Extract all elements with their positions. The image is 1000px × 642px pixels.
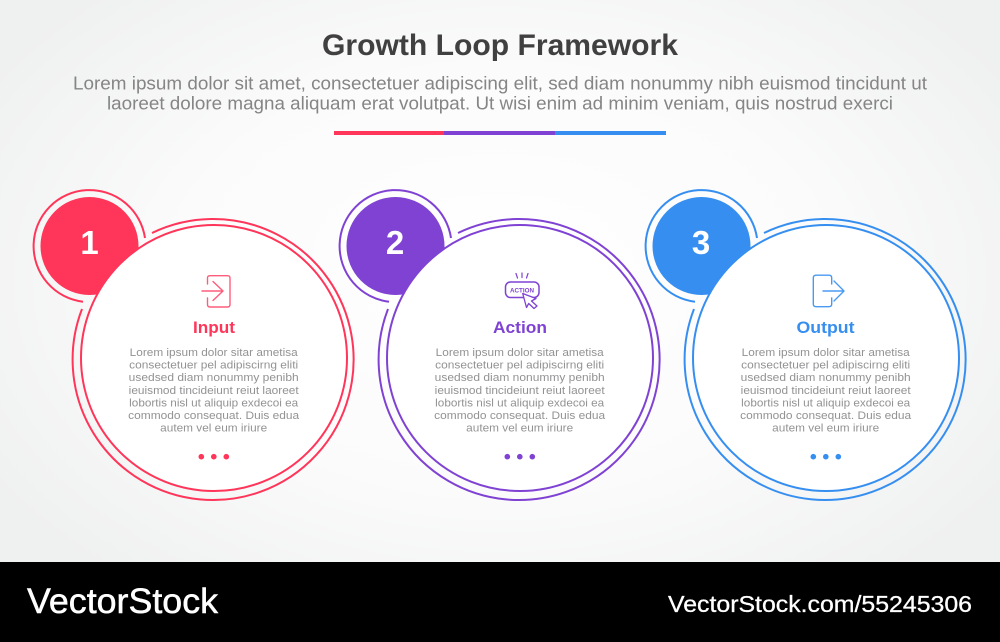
subtitle text <box>73 74 927 114</box>
body text: input: consectetuer pel adipiscirng eliti <box>129 360 298 372</box>
heading: action: Action <box>493 318 547 337</box>
panel: step 3 output <box>646 190 966 500</box>
heading: output: Output <box>796 318 855 337</box>
ring and white circle 2 <box>379 219 660 500</box>
icon: action button with cursor <box>506 273 539 308</box>
subtitle text: Lorem ipsum dolor sit amet, consectetuer adipiscing elit, sed diam nonummy nibh euismod tincidunt ut <box>73 74 927 94</box>
body text: output: commodo consequat. Duis edua <box>740 410 911 422</box>
number badge 2: 2 <box>386 224 404 261</box>
body text: input: Lorem ipsum dolor sitar ametisa <box>130 347 298 359</box>
ring and white circle 1 <box>73 219 354 500</box>
body text: input: ieuismod tincideiunt reiut laoreet <box>129 385 299 397</box>
body text: action: commodo consequat. Duis edua <box>434 410 605 422</box>
body text: action: usedsed diam nonummy penibh <box>435 372 605 384</box>
number badge 1 <box>34 190 145 302</box>
body text: output: lobortis nisl ut aliquip exdecoi ea <box>741 397 910 409</box>
icon: action button with cursor: ACTION <box>510 287 534 294</box>
number badge 1: 1 <box>80 224 99 261</box>
dots <box>504 454 535 460</box>
body text: action <box>434 347 605 435</box>
footer bar <box>0 562 1000 642</box>
body text: output: ieuismod tincideiunt reiut laoreet <box>741 385 911 397</box>
body text: input: commodo consequat. Duis edua <box>128 410 299 422</box>
subtitle text: laoreet dolore magna aliquam erat volutpat. Ut wisi enim ad minim veniam, quis nostrud exerci <box>107 94 893 114</box>
icon: enter door <box>202 276 230 307</box>
number badge 3: 3 <box>692 224 710 261</box>
body text: output: autem vel eum iriure <box>772 423 879 435</box>
number badge 3 <box>646 190 757 302</box>
body text: input: usedsed diam nonummy penibh <box>129 372 299 384</box>
footer url text: VectorStock.com/55245306 <box>668 591 972 617</box>
body text: action: ieuismod tincideiunt reiut laoreet <box>435 385 605 397</box>
body text: action: lobortis nisl ut aliquip exdecoi ea <box>435 397 604 409</box>
body text: action: autem vel eum iriure <box>466 423 573 435</box>
body text: action: consectetuer pel adipiscirng eliti <box>435 360 604 372</box>
body text: output: Lorem ipsum dolor sitar ametisa <box>742 347 910 359</box>
body text: input: autem vel eum iriure <box>160 423 267 435</box>
heading: input: Input <box>193 318 235 337</box>
panel: step 2 action <box>340 190 660 500</box>
ring and white circle 3 <box>685 219 966 500</box>
dots <box>198 454 229 460</box>
title: Growth Loop Framework <box>322 29 678 62</box>
body text: action: Lorem ipsum dolor sitar ametisa <box>436 347 604 359</box>
footer logo text: VectorStock <box>27 582 219 621</box>
panel: step 1 input <box>34 190 354 500</box>
body text: output <box>740 347 911 435</box>
dots <box>810 454 841 460</box>
body text: input: lobortis nisl ut aliquip exdecoi ea <box>129 397 298 409</box>
tricolor divider <box>334 131 666 135</box>
body text: input <box>128 347 299 435</box>
body text: output: consectetuer pel adipiscirng eliti <box>741 360 910 372</box>
number badge 2 <box>340 190 451 302</box>
body text: output: usedsed diam nonummy penibh <box>741 372 911 384</box>
icon: exit door <box>813 275 844 307</box>
